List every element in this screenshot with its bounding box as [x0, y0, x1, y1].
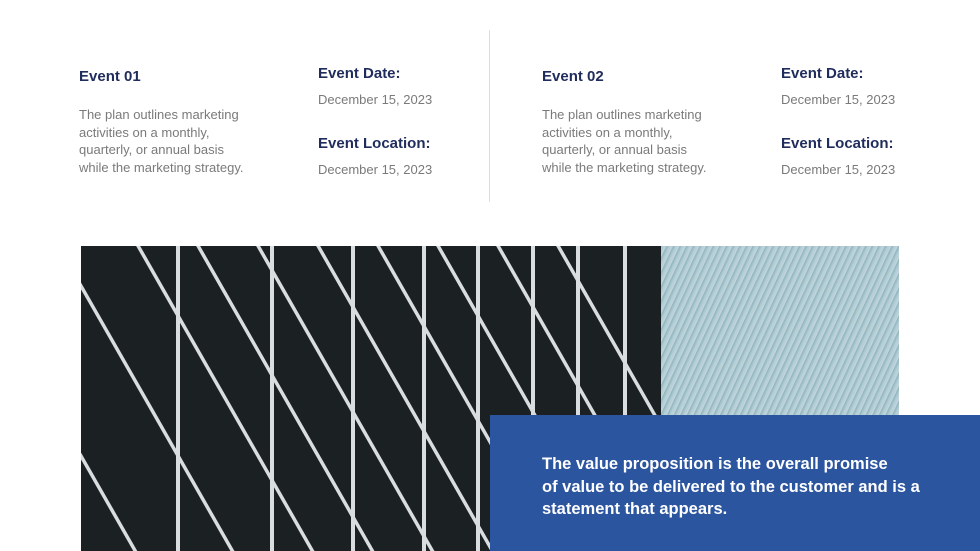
callout text: [542, 455, 920, 518]
description 02: while the marketing strategy.: [542, 160, 706, 174]
callout box: [490, 415, 980, 551]
divider: [489, 30, 490, 202]
event 02 block: [542, 68, 706, 174]
description 02: quarterly, or annual basis: [542, 142, 687, 157]
description 01: quarterly, or annual basis: [79, 142, 224, 157]
event 02 details: [781, 65, 895, 177]
label: event date: Event Date:: [318, 65, 401, 82]
description 02: [542, 107, 706, 174]
description 01: The plan outlines marketing: [79, 107, 239, 122]
description 01: while the marketing strategy.: [79, 160, 244, 174]
date: December 15, 2023: [318, 92, 432, 107]
label: event date: Event Date:: [781, 65, 864, 82]
callout text: of value to be delivered to the customer and is a: [542, 478, 920, 496]
location: December 15, 2023: [318, 162, 432, 177]
callout text: The value proposition is the overall promise: [542, 455, 888, 473]
callout text: statement that appears.: [542, 500, 727, 518]
description 02: activities on a monthly,: [542, 124, 673, 140]
event 01 block: [79, 68, 244, 174]
date: December 15, 2023: [781, 92, 895, 107]
description 01: activities on a monthly,: [79, 124, 210, 140]
heading: Event 01: Event 01: [79, 68, 141, 85]
label: event location: Event Location:: [318, 135, 431, 152]
description 01: [79, 107, 244, 174]
location: December 15, 2023: [781, 162, 895, 177]
label: event location: Event Location:: [781, 135, 894, 152]
event 01 details: [318, 65, 432, 177]
heading: Event 02: Event 02: [542, 68, 604, 85]
photo: building facade: [81, 246, 899, 551]
description 02: The plan outlines marketing: [542, 107, 702, 122]
